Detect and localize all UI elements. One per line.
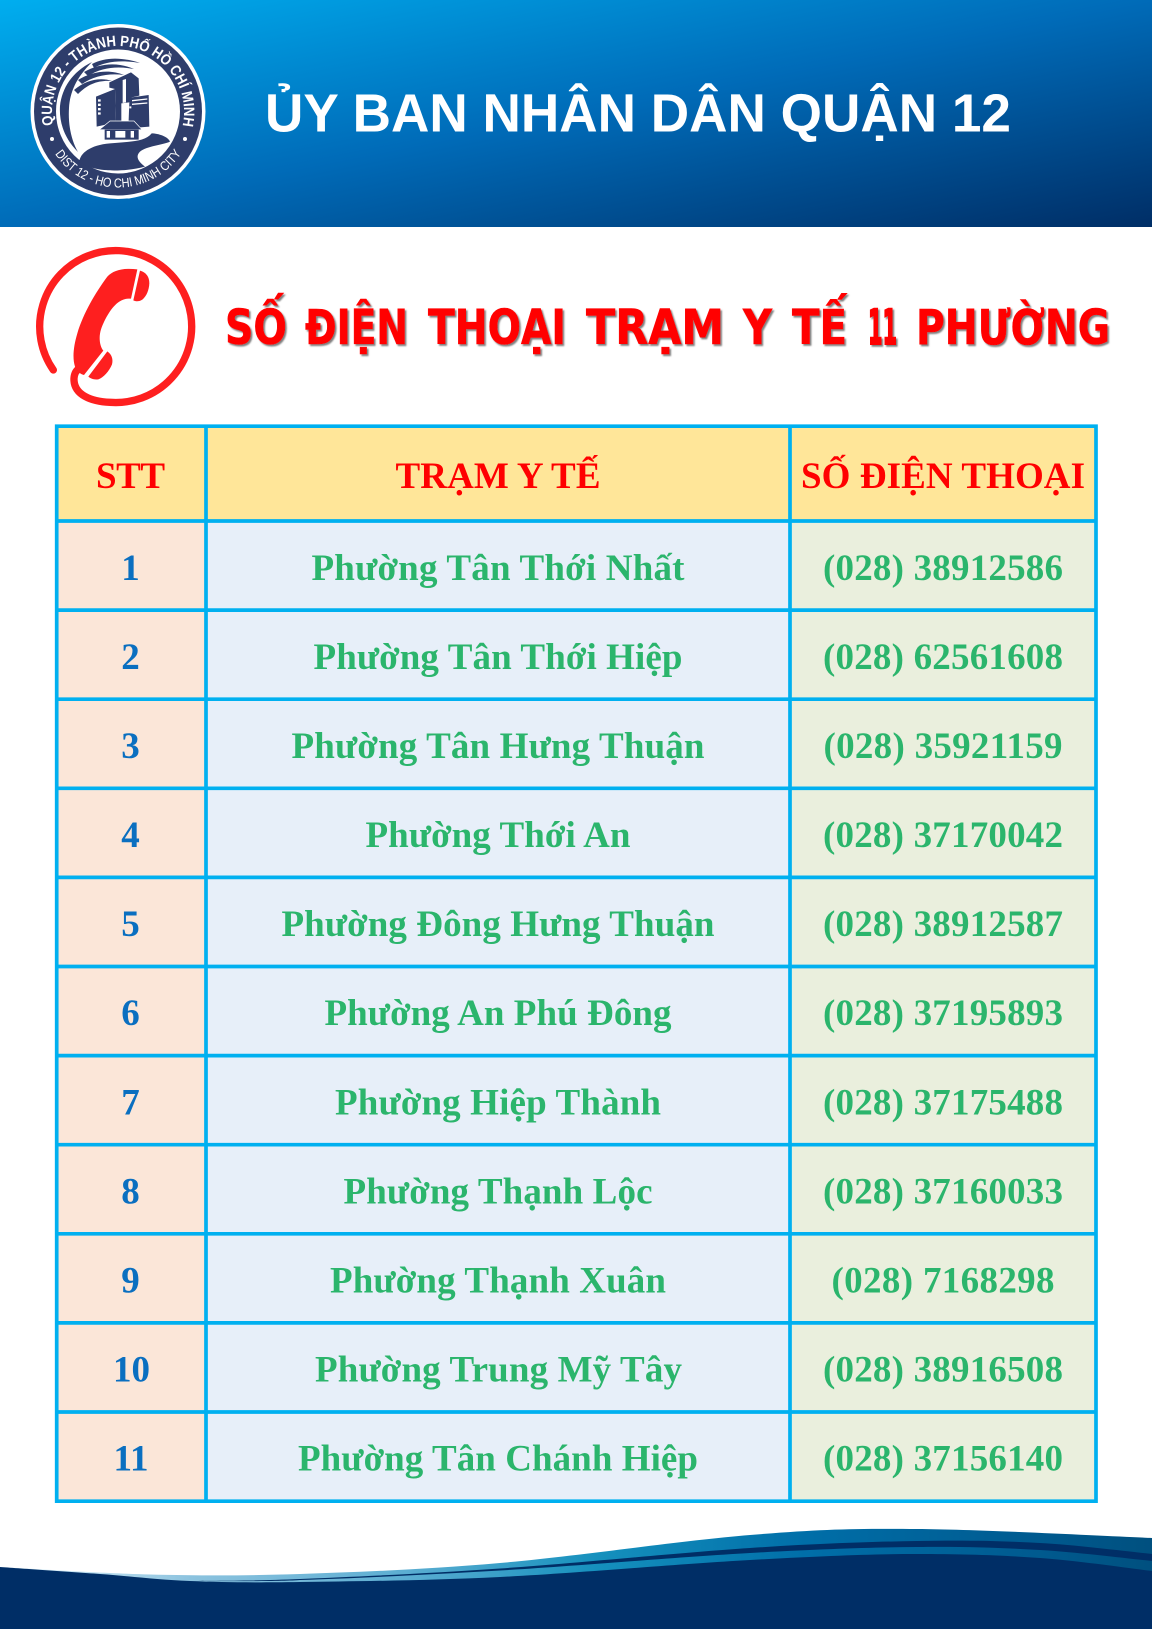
row 2: Phường Tân Thới Hiệp [314,637,682,678]
heading: So dien thoai tram y te 11 phuong: THOẠI [428,300,566,356]
icon: red telephone [40,251,192,403]
row 5 [121,904,1063,945]
row 11 [114,1438,1063,1480]
row 1: Phường Tân Thới Nhất [312,548,685,589]
row 1: 1 [121,548,140,589]
row 3: (028) 35921159 [824,726,1062,767]
row 6: Phường An Phú Đông [324,993,672,1034]
row 9 [121,1260,1054,1302]
row 6: 6 [121,993,140,1034]
heading: So dien thoai tram y te 11 phuong: TRẠM [586,300,724,356]
row 8: Phường Thạnh Lộc [344,1172,652,1212]
row 6: (028) 37195893 [823,993,1063,1034]
column: STT cells [56,521,206,1501]
logo: Quan 12 seal [30,24,206,199]
row 5: 5 [121,904,140,945]
row 2: 2 [121,637,140,678]
row 3 [121,726,1062,767]
heading: So dien thoai tram y te 11 phuong [225,293,1110,356]
row 7: Phường Hiệp Thành [335,1082,661,1124]
heading: So dien thoai tram y te 11 phuong: ĐIỆN [305,299,408,356]
header labels: STT [96,456,165,497]
heading: So dien thoai tram y te 11 phuong: TẾ [792,293,847,356]
row 5: Phường Đông Hưng Thuận [282,904,715,945]
header band [0,0,1152,227]
header labels [96,453,1085,497]
heading: So dien thoai tram y te 11 phuong: Y [742,300,773,356]
row 9: 9 [121,1260,140,1302]
row 7: 7 [121,1082,140,1124]
table: ward health stations [56,426,1096,1501]
row 4: (028) 37170042 [823,815,1063,856]
row 6 [121,993,1063,1034]
row 1 [121,548,1063,589]
row 8: (028) 37160033 [823,1172,1063,1212]
header labels: TRẠM Y TẾ [396,454,600,497]
row 7: (028) 37175488 [823,1082,1063,1124]
row 3: Phường Tân Hưng Thuận [292,726,705,767]
column: phone cells [790,521,1096,1501]
row 10: 10 [113,1350,150,1390]
row 11: 11 [114,1438,148,1480]
row 11: (028) 37156140 [823,1438,1063,1480]
row 4 [121,815,1063,856]
table header row [56,426,1096,521]
row 9: (028) 7168298 [832,1260,1054,1302]
column: station cells [206,521,790,1501]
row 2 [121,637,1063,678]
row 9: Phường Thạnh Xuân [330,1260,666,1302]
row 8 [121,1172,1063,1212]
heading: So dien thoai tram y te 11 phuong: 11 [868,300,897,356]
header labels: SỐ ĐIỆN THOẠI [801,453,1085,497]
logo: Quan 12 seal: QUẬN 12 - THÀNH PHỐ HỒ CHÍ MINH [40,36,194,127]
footer wave [0,1529,1152,1629]
row 4: Phường Thới An [366,815,631,856]
row 10: Phường Trung Mỹ Tây [315,1350,682,1390]
row 10 [113,1350,1063,1390]
row 8: 8 [121,1172,140,1212]
row 2: (028) 62561608 [823,637,1063,678]
row 3: 3 [121,726,140,767]
row 7 [121,1082,1063,1124]
row 4: 4 [121,815,140,856]
row 1: (028) 38912586 [823,548,1063,589]
row 11: Phường Tân Chánh Hiệp [298,1438,698,1480]
heading: So dien thoai tram y te 11 phuong: SỐ [225,293,287,356]
title: Uy ban nhan dan Quan 12: ỦY BAN NHÂN DÂN QUẬN 12 [265,83,1011,144]
logo: Quan 12 seal: DIST 12 - HO CHI MINH CITY [55,148,180,188]
heading: So dien thoai tram y te 11 phuong: PHƯỜNG [916,299,1110,356]
row 5: (028) 38912587 [823,904,1063,945]
row 10: (028) 38916508 [823,1350,1063,1390]
